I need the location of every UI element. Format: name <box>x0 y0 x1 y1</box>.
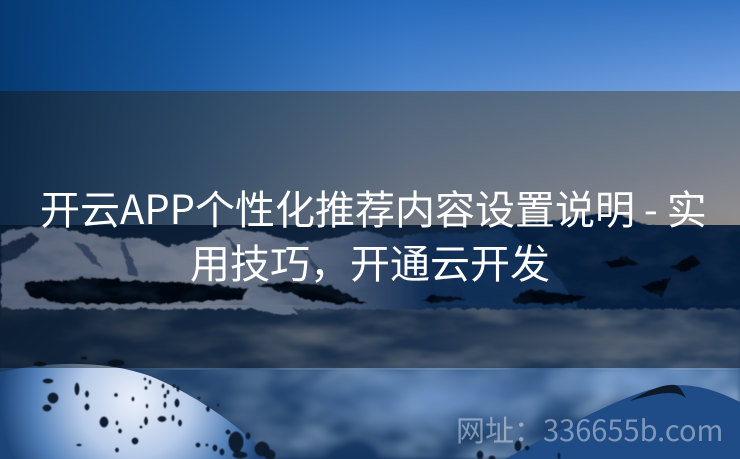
distant snow hill, lower right <box>476 385 740 459</box>
title: 开云APP个性化推荐内容设置说明 - 实 <box>40 178 707 236</box>
title: 用技巧，开通云开发 <box>190 232 550 290</box>
cloud sea <box>0 225 740 459</box>
title <box>40 178 707 290</box>
dark rock bands <box>22 254 700 303</box>
dark translucent band <box>0 91 740 368</box>
sky behind band <box>0 91 740 240</box>
distant mountain range <box>0 210 740 314</box>
foreground snow hill with trees <box>0 356 276 459</box>
watermark: website address: 网址：336655b.com <box>456 408 723 450</box>
sky above band <box>0 0 740 92</box>
